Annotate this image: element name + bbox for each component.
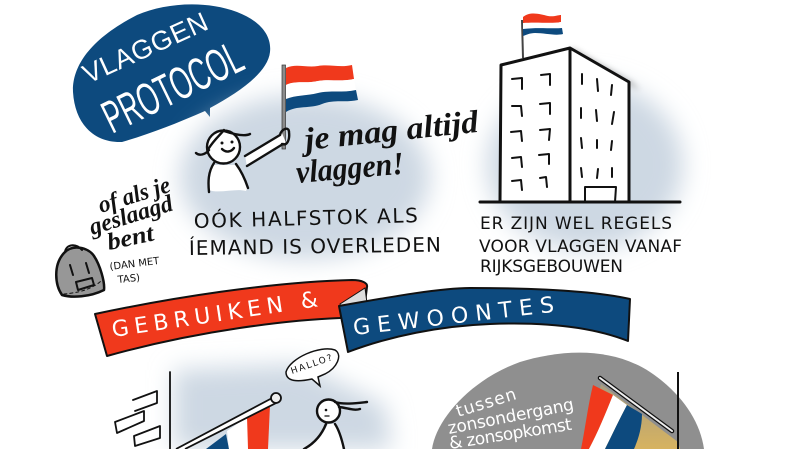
banner text: gewoontes: GEWOONTES	[352, 293, 555, 341]
text: dan met tas: TAS)	[116, 273, 141, 286]
text: regels	[479, 214, 682, 277]
handwritten text: je mag altijd vlaggen: je mag altijd	[298, 103, 481, 158]
icon: half-mast flag	[176, 393, 281, 449]
text: ook halfstok: ÍEMAND IS OVERLEDEN	[189, 232, 441, 260]
icon: waving flag	[282, 65, 358, 149]
icon: brick wall	[115, 372, 170, 449]
title line one: VLAGGEN	[78, 7, 212, 89]
banner text: gebruiken: GEBRUIKEN &	[110, 287, 320, 343]
panel: hallo	[115, 349, 392, 449]
soft blue background	[487, 80, 683, 250]
handwritten text: je mag altijd vlaggen	[294, 103, 481, 190]
text: dan met tas	[109, 256, 161, 286]
text: regels: ER ZIJN WEL REGELS	[480, 214, 672, 234]
banner: red	[95, 280, 367, 356]
text: dan met tas: (DAN MET	[109, 256, 161, 273]
handwritten text: of als je geslaagd bent: bent	[105, 220, 158, 256]
banner: blue	[339, 288, 630, 352]
text: regels: RIJKSGEBOUWEN	[480, 257, 623, 277]
speech bubble: hallo: HALLO?	[290, 353, 334, 377]
text: regels: VOOR VLAGGEN VANAF	[479, 237, 682, 257]
soft blue background	[174, 364, 392, 449]
speech bubble: hallo	[286, 349, 339, 386]
handwritten text: je mag altijd vlaggen: vlaggen!	[294, 145, 405, 190]
handwritten text: tussen zonsondergang: zonsondergang	[446, 395, 576, 439]
figure holding flag	[196, 129, 289, 192]
panel: geslaagd	[56, 172, 177, 297]
panel: zonsondergang	[432, 353, 704, 449]
handwritten text: tussen zonsondergang: tussen	[454, 385, 519, 422]
grey night ellipse	[432, 353, 704, 449]
panel: altijd vlaggen	[180, 65, 481, 260]
icon: flag at night	[581, 372, 680, 449]
text: ook halfstok: OÓK HALFSTOK ALS	[194, 203, 418, 233]
title speech bubble	[73, 4, 270, 143]
icon: backpack	[56, 245, 104, 297]
soft blue background	[180, 95, 430, 259]
figure waving	[304, 400, 367, 449]
handwritten text: of als je geslaagd bent	[85, 172, 177, 256]
handwritten text: tussen zonsondergang	[446, 385, 576, 449]
icon: building flag	[522, 13, 563, 58]
text: ook halfstok	[189, 203, 441, 260]
handwritten text: of als je geslaagd bent: geslaagd	[85, 190, 177, 241]
icon: building	[480, 47, 680, 202]
handwritten text: of als je geslaagd bent: of als je	[95, 172, 174, 219]
banner: gebruiken en gewoontes	[95, 280, 630, 356]
panel: rijksgebouwen	[479, 13, 683, 277]
